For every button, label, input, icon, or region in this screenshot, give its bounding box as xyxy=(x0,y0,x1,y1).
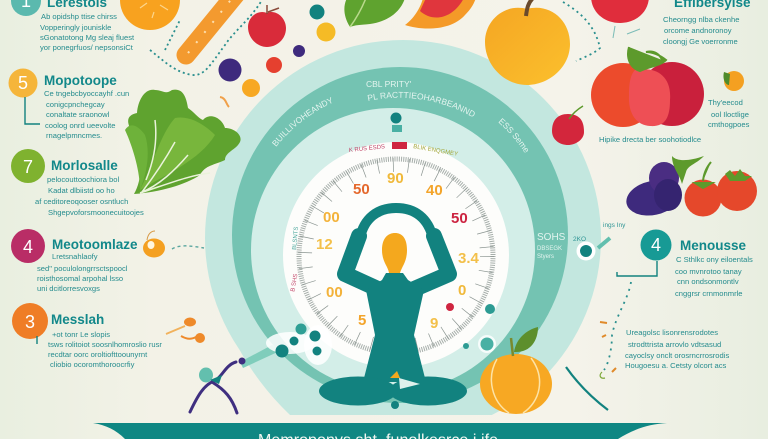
panel: item 3: tsws rolitoiot soosnlhomroslio rusr xyxy=(48,340,162,349)
text block: yor ponegrfuos/ nepsonsiCt xyxy=(40,43,134,52)
right decorative trail xyxy=(573,222,631,378)
panel: item 5: conigcpnchegcay xyxy=(46,100,105,109)
panel: item 5: 5 xyxy=(18,73,28,93)
icon: orange fruit xyxy=(143,231,165,258)
icon: carrot xyxy=(186,0,236,55)
panel: item 1 xyxy=(11,0,135,52)
icon: leaf xyxy=(344,0,405,27)
meditating figure xyxy=(319,208,467,409)
panel: item 7: Kadat dlbiistd oo ho xyxy=(48,186,115,195)
dial numbers: 90 xyxy=(387,170,404,187)
panel: item 3: recdtar oorc oroltiofttoounyrnt xyxy=(48,350,148,359)
head xyxy=(382,233,407,273)
panel: item 4 left: Lretsnahlaofy xyxy=(52,252,98,261)
icon: yellow fruit xyxy=(242,79,260,97)
panel: item 4 right: C Sthlkc ony eiloentals xyxy=(676,255,753,264)
text block: Ab opidshp ttise chirss xyxy=(41,12,117,21)
panel: item 4 left: Meotoomlaze xyxy=(52,237,138,252)
icon: top red apple xyxy=(591,0,649,23)
text block: right note: ool Iloctlige xyxy=(711,110,749,119)
panel: item 4 right xyxy=(617,230,753,298)
panel: item 7: Shgepvoforsmoonecuitoojes xyxy=(48,208,144,217)
ring labels: CBL PRITY' xyxy=(366,79,412,89)
icon: small orange xyxy=(723,71,744,91)
panel: item 5: conaltate sraonowl xyxy=(46,110,110,119)
dial numbers: 50 xyxy=(353,181,370,198)
panel: item 4 left: uni dcitlorresvoxgs xyxy=(37,284,100,293)
icon: large orange apple xyxy=(485,8,570,85)
panel: item 5: coolog onrd ueevolte xyxy=(45,121,116,130)
panel: item 3: cliobio ocoromthoroocrfiy xyxy=(50,360,135,369)
ring labels: BUILLIVOHEANDY xyxy=(272,97,332,146)
dial numbers: 00 xyxy=(326,284,343,301)
panel: item 4 right: coo mvnrotoo tanay xyxy=(675,267,742,276)
panel: item 4 right: cnn ondsonmontlv xyxy=(677,277,739,286)
right decorative trail: 2KO xyxy=(573,236,586,243)
dial gauge xyxy=(290,112,493,353)
dark arc xyxy=(566,367,608,410)
icon: orange swooshes xyxy=(166,318,205,343)
dial gauge: K RUS ESDS xyxy=(349,144,385,154)
icon: plum and tomatoes xyxy=(623,156,757,220)
small dial marks: BLSNTS xyxy=(292,226,300,250)
panel: item 4 left xyxy=(11,229,138,293)
text block xyxy=(40,12,135,52)
dial numbers: 40 xyxy=(426,182,443,199)
ring labels: Styers xyxy=(537,254,554,260)
torso xyxy=(363,273,426,382)
text block: lower right: Hougoesu a. Cetsty olcort acs xyxy=(625,361,727,370)
icon: grapefruit xyxy=(405,0,476,29)
dial numbers: 12 xyxy=(316,236,333,253)
top marker xyxy=(390,112,402,132)
panel: item 5: rnagelpmncmes. xyxy=(46,131,102,140)
text block: sGonatotong Mg sleaj fluest xyxy=(40,33,135,42)
panel: item 5 xyxy=(8,68,129,140)
icon: teal berry xyxy=(310,4,324,20)
text block: right note: cmthogpoes xyxy=(708,120,750,129)
panel: item 3: 3 xyxy=(25,312,35,332)
panel: top right xyxy=(663,0,751,46)
central rings xyxy=(205,40,601,436)
panel: item 7: pelocouttoochiora bol xyxy=(47,175,120,184)
dotted path xyxy=(150,0,262,75)
dial gauge: BLIK ENQGMEY xyxy=(413,144,458,158)
panel: item 3 xyxy=(12,303,162,369)
ring labels: ESS Seme xyxy=(498,118,528,152)
icon: lettuce xyxy=(125,90,241,194)
text block: right note xyxy=(708,98,750,129)
dial numbers xyxy=(316,170,480,332)
panel: item 4 left: sed" poculolongrrsctspoocl xyxy=(37,264,128,273)
text block: Vopperingly jouniskle xyxy=(40,23,111,32)
text block: lower right: cayoclsy onclt orosrncrrosrodis xyxy=(625,351,729,360)
dial numbers: 00 xyxy=(323,209,340,226)
panel: item 4 right: Menousse xyxy=(680,238,747,253)
text block: lower right xyxy=(625,328,729,370)
ring labels: DBSEGK xyxy=(537,246,562,252)
icon: top orange xyxy=(120,0,180,30)
red marker xyxy=(392,142,407,149)
fruit cluster top xyxy=(218,0,649,107)
right dial dots xyxy=(463,304,496,353)
panel: top right: cloongj Ge voerronme xyxy=(663,37,738,46)
panel: item 4 right: cnggrsr crnmonmrle xyxy=(675,289,743,298)
decorative molecule cluster xyxy=(240,324,332,368)
icon: runner xyxy=(190,358,246,413)
bottom banner xyxy=(93,423,667,439)
panel: item 4 right: 4 xyxy=(651,235,661,255)
panel: top right: Cheorngg nlba ckenhe xyxy=(663,15,739,24)
panel: item 5: Ce tngebcbyoccayhf .cun xyxy=(44,89,129,98)
icon: red berry xyxy=(266,57,282,73)
text block: tomato caption: Hipike drecta ber soohotiodlce xyxy=(599,135,701,144)
panel: item 3: Messlah xyxy=(51,312,104,327)
panel: item 7: 7 xyxy=(23,157,33,177)
panel: item 7: Morlosalle xyxy=(51,158,118,173)
panel: item 7: af ceditoreoqooser osntluch xyxy=(35,197,128,206)
small dial marks: B SHS xyxy=(290,274,299,292)
icon: orange squiggle xyxy=(220,97,229,107)
text block: lower right: Ureagolsc lisonrensrodotes xyxy=(626,328,718,337)
icon: big tomato xyxy=(591,47,704,127)
icon: peach xyxy=(480,327,552,414)
panel: top right: orcome andnoronoy xyxy=(664,26,732,35)
icon: red apple xyxy=(248,12,286,47)
panel: item 4 left: roisthosomal arpohal lsso xyxy=(37,274,123,283)
ring labels xyxy=(272,79,566,260)
icon: small purple berry xyxy=(293,45,305,57)
ring labels: SOHS xyxy=(537,232,566,243)
dial numbers: 9 xyxy=(430,315,438,332)
right decorative trail: ings Iny xyxy=(603,222,626,229)
dial numbers: 3.4 xyxy=(458,250,480,267)
arms xyxy=(345,208,449,290)
legs xyxy=(319,376,467,406)
dial numbers: 5 xyxy=(358,312,366,329)
icon: yellow berry xyxy=(316,22,336,42)
text block: right note: Thy'eecod xyxy=(708,98,743,107)
small dial marks xyxy=(290,226,454,311)
text block: lower right: strodttrista arrovlo vdtsasud xyxy=(628,340,721,349)
small orange icons left xyxy=(143,231,205,343)
panel: item 3: +ot tonr Le slopis xyxy=(52,330,110,339)
dial numbers: 0 xyxy=(458,282,466,299)
panel: item 4 left: 4 xyxy=(23,237,33,257)
dotted path right xyxy=(563,2,600,61)
panel: item 7 xyxy=(11,149,144,217)
icon: purple berry xyxy=(218,58,242,82)
dial numbers: 50 xyxy=(451,210,468,227)
icon: cherry xyxy=(552,106,584,145)
panel: item 5: Mopotoope xyxy=(44,73,117,88)
